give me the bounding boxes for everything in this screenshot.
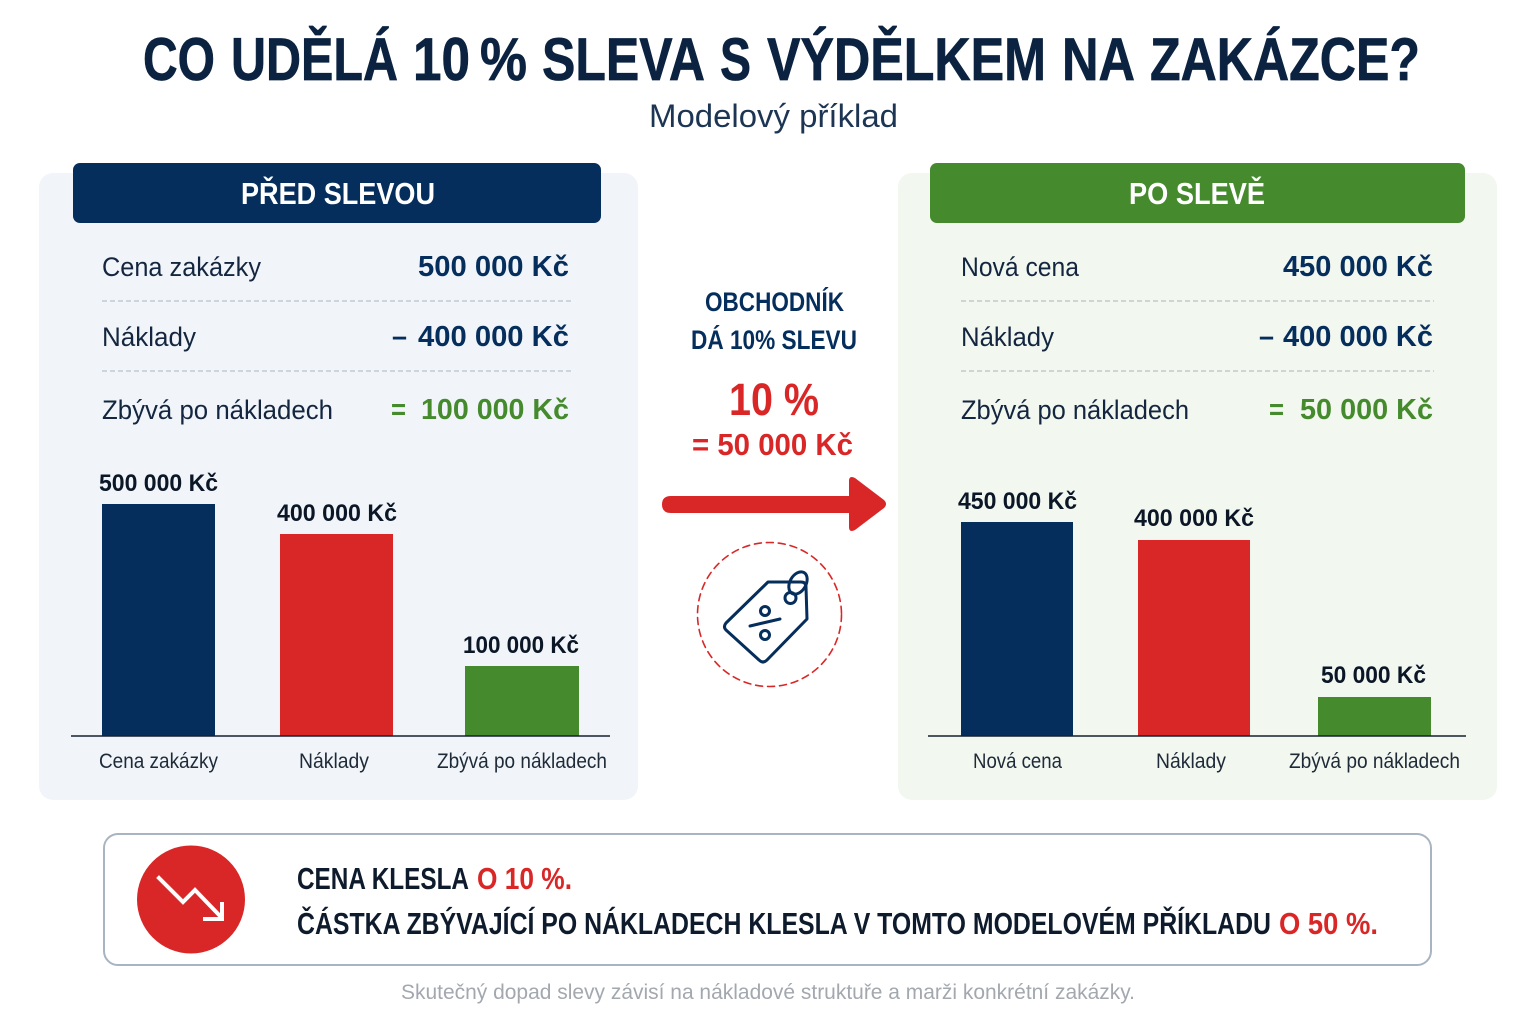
bar: remaining (437, 632, 607, 773)
bar: remaining (1289, 662, 1460, 773)
bar: costs: 400 000 Kč (1134, 505, 1254, 532)
row: remaining after costs: = (1269, 394, 1284, 426)
row: remaining after costs (961, 394, 1433, 426)
row: order price: 500 000 Kč (418, 251, 569, 283)
row: remaining after costs: = (391, 394, 406, 426)
row: costs: – (1259, 321, 1274, 353)
row: new price (961, 251, 1433, 283)
summary box (104, 834, 1431, 965)
title: % (480, 26, 527, 93)
callout: salesperson gives discount (691, 286, 857, 462)
heading: before discount: PŘED SLEVOU (241, 175, 435, 211)
bar: costs: Náklady (299, 750, 369, 773)
heading: after discount (930, 163, 1465, 223)
bar: remaining: 50 000 Kč (1321, 662, 1426, 689)
row: costs: 400 000 Kč (418, 321, 569, 353)
footnote: Skutečný dopad slevy závisí na nákladové struktuře a marži konkrétní zakázky. (401, 981, 1135, 1004)
icon: discount price tag (698, 542, 842, 686)
row: costs: 400 000 Kč (1283, 321, 1433, 353)
row: new price: Nová cena (961, 252, 1080, 282)
row: costs (961, 321, 1433, 353)
callout: salesperson gives discount: OBCHODNÍK (705, 286, 844, 317)
heading: before discount (73, 163, 601, 223)
row: costs (102, 321, 569, 353)
bar chart: before discount (71, 470, 610, 773)
title: UDĚLÁ (231, 26, 398, 93)
row: costs: Náklady (961, 322, 1054, 352)
title: 10 (413, 26, 470, 93)
bar: new price: Nová cena (973, 750, 1062, 773)
bar: remaining: Zbývá po nákladech (1289, 750, 1460, 773)
callout: salesperson gives discount: = 50 000 Kč (692, 427, 853, 462)
heading: after discount: PO SLEVĚ (1129, 175, 1265, 211)
title (143, 26, 1420, 93)
bar: order price: 500 000 Kč (99, 470, 218, 497)
callout: salesperson gives discount: DÁ 10% SLEVU (691, 324, 857, 355)
bar chart: after discount (928, 488, 1466, 773)
row: remaining after costs: 50 000 Kč (1300, 394, 1433, 426)
panel: before discount (39, 163, 638, 800)
title: NA (1062, 26, 1135, 93)
icon: falling trend (137, 846, 245, 954)
bar: costs (1134, 505, 1254, 773)
row: costs: – (392, 321, 407, 353)
callout: salesperson gives discount: 10 % (729, 374, 819, 425)
title: S (720, 26, 751, 93)
bar: new price (958, 488, 1077, 773)
row: new price: 450 000 Kč (1283, 251, 1433, 283)
row: remaining after costs: Zbývá po nákladech (961, 395, 1189, 425)
row: remaining after costs (102, 394, 569, 426)
row: remaining after costs: 100 000 Kč (421, 394, 569, 426)
title: ZAKÁZCE? (1150, 26, 1420, 93)
bar: new price: 450 000 Kč (958, 488, 1077, 515)
bar: costs: Náklady (1156, 750, 1226, 773)
bar: costs (277, 500, 397, 773)
bar: order price (99, 470, 218, 773)
arrow (662, 477, 886, 531)
row: order price (102, 251, 569, 283)
title: CO (143, 26, 215, 93)
row: costs: Náklady (102, 322, 196, 352)
summary line 1: CENA KLESLA (297, 861, 469, 896)
row: order price: Cena zakázky (102, 252, 261, 282)
summary line 1: O 10 %. (477, 861, 572, 896)
row: remaining after costs: Zbývá po nákladech (102, 395, 333, 425)
bar: remaining: Zbývá po nákladech (437, 750, 607, 773)
title: VÝDĚLKEM (767, 26, 1046, 93)
bar: remaining: 100 000 Kč (463, 632, 579, 659)
bar: order price: Cena zakázky (99, 750, 218, 773)
summary line 2: ČÁSTKA ZBÝVAJÍCÍ PO NÁKLADECH KLESLA V TOMTO MODELOVÉM PŘÍKLADU (297, 905, 1271, 941)
panel: after discount (898, 163, 1497, 800)
summary line 2: O 50 %. (1279, 906, 1378, 941)
bar: costs: 400 000 Kč (277, 500, 397, 527)
title: SLEVA (542, 26, 705, 93)
subtitle: Modelový příklad (649, 98, 898, 134)
